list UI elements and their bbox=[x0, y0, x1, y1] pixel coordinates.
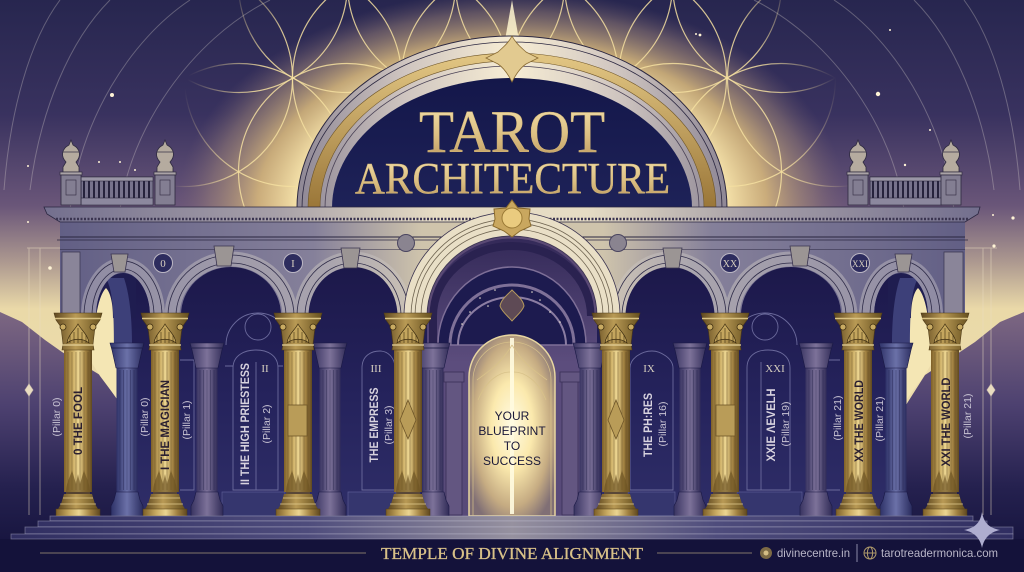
ii the high priestess bbox=[240, 363, 273, 485]
medallion XXI: XXI bbox=[852, 259, 868, 269]
medallion XX bbox=[720, 254, 740, 272]
medallion I bbox=[284, 254, 302, 272]
medallion right ornament bbox=[610, 234, 626, 252]
i the magician bbox=[139, 380, 193, 470]
center door frame pillars bbox=[444, 372, 580, 515]
iii the empress bbox=[369, 363, 395, 462]
footer line right bbox=[657, 552, 752, 554]
left pier bbox=[62, 252, 80, 314]
xxi the world: XXI THE WORLD bbox=[941, 378, 953, 466]
0 the fool bbox=[51, 387, 85, 455]
central gold medallion bbox=[493, 200, 531, 237]
blue vault right bbox=[892, 278, 918, 345]
center bay bbox=[427, 236, 597, 518]
door caption: TO bbox=[504, 439, 520, 453]
sky opening right bbox=[906, 288, 934, 400]
balustrade right bbox=[847, 140, 962, 205]
sky opening left bbox=[90, 288, 118, 400]
keystones bbox=[111, 246, 912, 272]
xx the world: XX THE WORLD bbox=[854, 380, 866, 462]
arch gold band bbox=[308, 53, 716, 208]
i the magician: (Pillar 0) bbox=[139, 397, 151, 437]
left mountains bbox=[0, 312, 119, 545]
iii the empress: (Pillar 3) bbox=[383, 405, 395, 445]
xxie aevelh bbox=[765, 363, 792, 462]
door caption bbox=[478, 409, 546, 468]
xx the world bbox=[832, 380, 886, 462]
left arch interior bbox=[96, 270, 136, 318]
xx the world: (Pillar 21) bbox=[874, 397, 886, 441]
side columns bbox=[110, 343, 913, 516]
door caption: SUCCESS bbox=[483, 454, 541, 468]
medallion XX: XX bbox=[723, 259, 738, 270]
ix the ph:res: (Pillar 16) bbox=[657, 402, 669, 446]
xxie aevelh: (Pillar 19) bbox=[780, 402, 792, 446]
gold columns bbox=[54, 313, 969, 516]
right pier bbox=[944, 252, 963, 314]
stars bbox=[24, 29, 1015, 466]
xxie aevelh: XXI bbox=[765, 363, 785, 375]
medallion 0: 0 bbox=[160, 258, 166, 270]
medallion left ornament bbox=[398, 234, 414, 252]
icon: divine centre bbox=[760, 547, 772, 559]
xx the world: (Pillar 21) bbox=[832, 396, 844, 440]
main title bbox=[355, 99, 670, 203]
0 the fool: (Pillar 0) bbox=[51, 397, 63, 437]
xxi the world: (Pillar 21) bbox=[962, 394, 974, 438]
lower wall blocks bbox=[222, 492, 802, 516]
bay panels bbox=[180, 313, 840, 490]
pillar labels bbox=[51, 363, 974, 485]
central arch moulding bbox=[404, 212, 620, 316]
arch medallion bbox=[486, 36, 538, 82]
right mountains bbox=[906, 312, 1024, 545]
door medallion bbox=[500, 290, 524, 321]
medallion XXI bbox=[850, 254, 870, 272]
footer ground bbox=[0, 539, 1024, 572]
i the magician: I THE MAGICIAN bbox=[160, 380, 172, 470]
xxi the world bbox=[941, 378, 974, 466]
ray above title arch bbox=[505, 0, 519, 40]
ii the high priestess: II THE HIGH PRIESTESS bbox=[240, 363, 252, 485]
main title: TAROT bbox=[419, 99, 605, 165]
i the magician: (Pillar 1) bbox=[181, 400, 193, 440]
website two: tarotreadermonica.com bbox=[881, 546, 998, 560]
cornice bbox=[44, 207, 980, 222]
temple steps bbox=[11, 516, 1013, 539]
column ornaments bbox=[288, 400, 735, 439]
sparkle icon bbox=[964, 512, 1000, 548]
arch navy field bbox=[332, 78, 692, 208]
interior bays bbox=[90, 250, 934, 518]
icon: globe bbox=[864, 547, 876, 559]
door caption: YOUR bbox=[495, 409, 530, 423]
iii the empress: THE EMPRESS bbox=[369, 387, 381, 462]
celestial orbit arcs bbox=[4, 0, 1020, 210]
stone spandrel wall with arch openings bbox=[60, 250, 965, 320]
glowing door bbox=[469, 335, 555, 516]
right side ornament line bbox=[965, 248, 997, 515]
website one: divinecentre.in bbox=[777, 546, 850, 560]
right arch interior bbox=[888, 270, 928, 318]
arch outer stone bbox=[297, 36, 727, 208]
entablature bbox=[44, 207, 980, 256]
iii the empress: III bbox=[370, 363, 382, 375]
footer divider bbox=[856, 544, 858, 562]
blue vault left bbox=[106, 278, 132, 345]
sacred geometry flower of life bbox=[176, 0, 848, 207]
central golden glow bbox=[177, 0, 847, 420]
0 the fool: 0 THE FOOL bbox=[73, 387, 85, 455]
door caption: BLUEPRINT bbox=[478, 424, 546, 438]
ix the ph:res: THE PH:RES bbox=[643, 393, 655, 457]
ix the ph:res bbox=[643, 363, 669, 457]
ix the ph:res: IX bbox=[643, 363, 655, 375]
main title: ARCHITECTURE bbox=[355, 154, 670, 203]
arch mouldings bbox=[84, 255, 940, 316]
medallion 0 bbox=[154, 254, 172, 272]
ii the high priestess: (Pillar 2) bbox=[261, 404, 273, 444]
left side ornament line bbox=[25, 248, 60, 515]
footer line left bbox=[40, 552, 366, 554]
xxie aevelh: XXIE ΛEVELH bbox=[766, 388, 778, 462]
ii the high priestess: II bbox=[261, 363, 269, 375]
balustrade left bbox=[60, 140, 176, 205]
title arch bbox=[297, 36, 727, 208]
footer title: TEMPLE OF DIVINE ALIGNMENT bbox=[381, 544, 644, 563]
medallion I: I bbox=[291, 258, 295, 270]
